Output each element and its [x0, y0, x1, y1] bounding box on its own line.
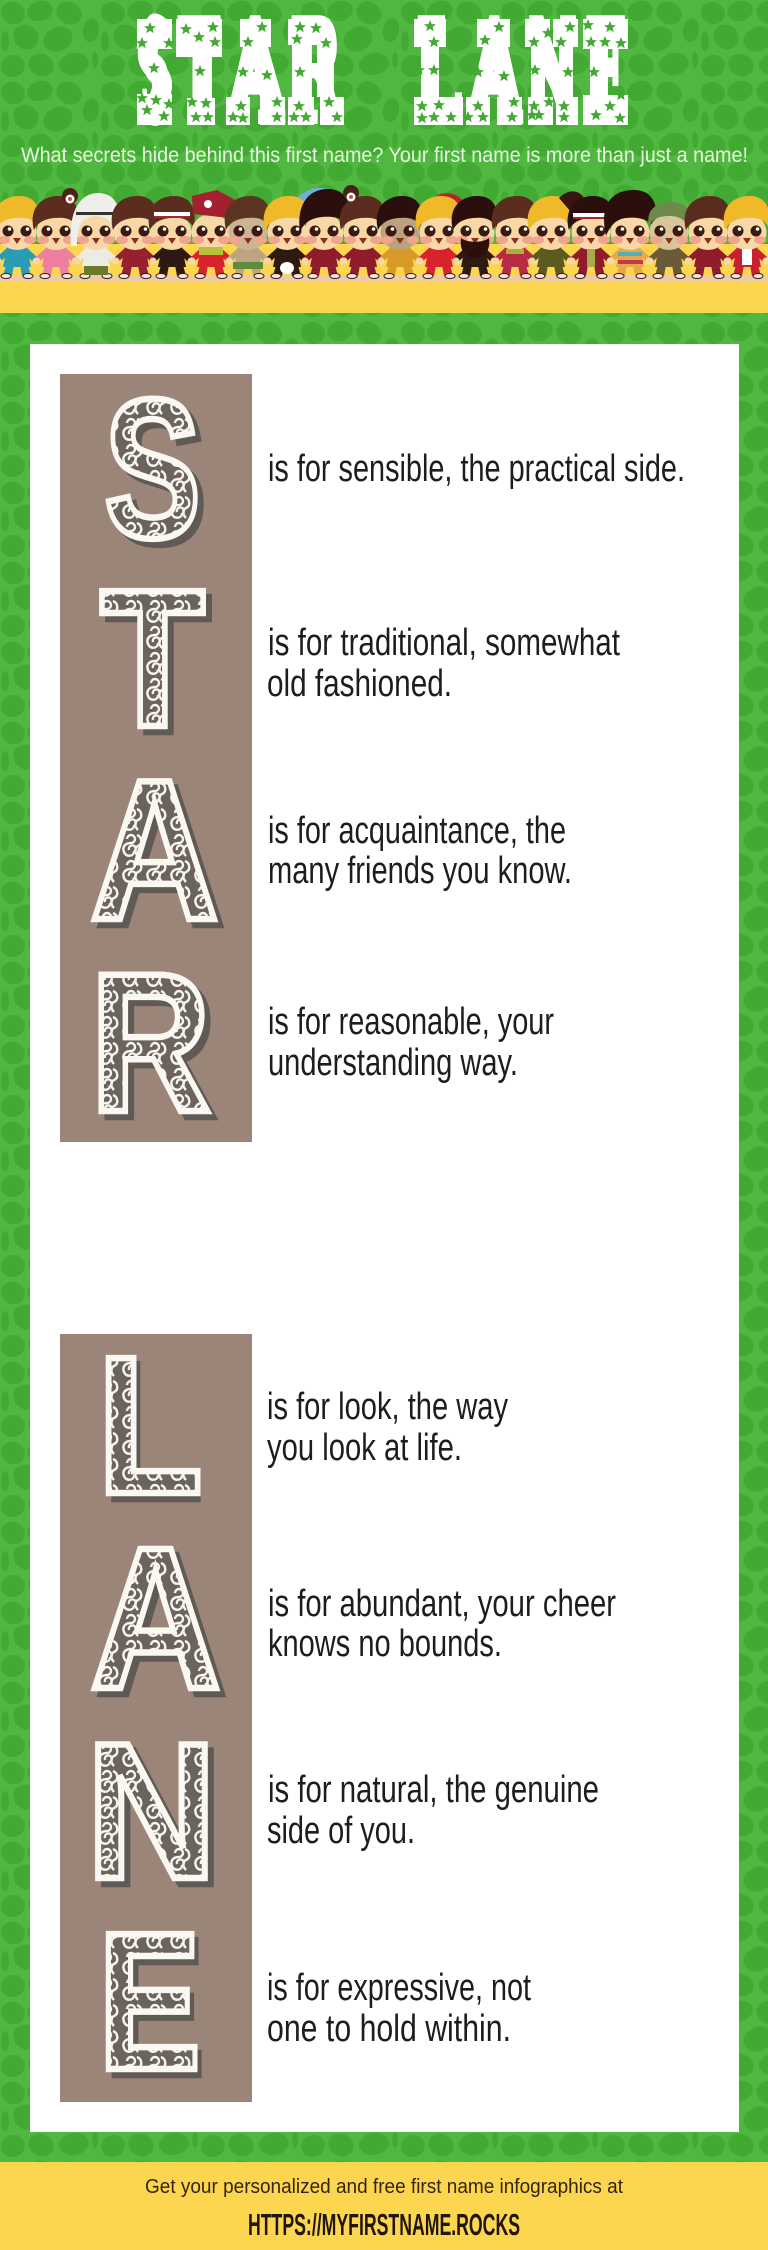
letter A: A	[90, 1505, 221, 1731]
child 13	[452, 196, 498, 278]
text: N lines	[267, 1769, 599, 1852]
letter S: S	[110, 364, 207, 585]
child 2	[33, 188, 79, 278]
child 18	[646, 202, 692, 278]
title	[136, 0, 628, 155]
text: L lines: is for look, the way	[267, 1386, 508, 1428]
child 4	[112, 196, 158, 278]
text: E lines: one to hold within.	[267, 2008, 511, 2050]
text: A lines	[268, 1583, 616, 1665]
child 15	[528, 191, 585, 278]
child 11	[377, 196, 423, 278]
text: R lines	[268, 1001, 554, 1084]
letter R: R	[90, 932, 211, 1153]
letter E: E	[98, 1892, 201, 2111]
ground line	[0, 276, 768, 281]
child 9	[299, 189, 350, 278]
letter T: T	[100, 549, 205, 768]
row of cartoon children	[0, 185, 768, 278]
child 8	[264, 188, 333, 278]
letter A: A	[90, 739, 219, 962]
child 17	[604, 190, 656, 278]
child 20	[724, 196, 768, 278]
footer url: HTTPS://MYFIRSTNAME.ROCKS	[248, 2207, 520, 2242]
child 10	[340, 185, 386, 278]
child 14	[492, 196, 538, 278]
letter N: N	[86, 1703, 217, 1920]
text: E lines	[267, 1967, 531, 2050]
child 5	[149, 196, 195, 278]
text: T lines	[267, 622, 620, 705]
child 12	[416, 193, 465, 278]
panel: STAR letter column	[60, 374, 252, 1142]
letter A: A	[96, 1511, 227, 1737]
panel: LANE letter column	[60, 1334, 252, 2102]
text: R lines: understanding way.	[268, 1042, 518, 1084]
text: R lines: is for reasonable, your	[268, 1001, 554, 1043]
panel: white content	[30, 344, 739, 2132]
footer text: Get your personalized and free first name infographics at	[145, 2176, 623, 2198]
child 1	[0, 196, 40, 278]
child 7	[225, 196, 271, 278]
letter E: E	[104, 1898, 205, 2117]
text: N lines: side of you.	[267, 1810, 415, 1852]
text: E lines: is for expressive, not	[267, 1967, 531, 2009]
text: N lines: is for natural, the genuine	[268, 1769, 599, 1811]
child 3	[71, 193, 122, 278]
text: A lines	[268, 810, 572, 892]
footer band	[0, 2162, 768, 2250]
text: A lines: many friends you know.	[268, 850, 572, 892]
text: L lines: you look at life.	[267, 1427, 462, 1469]
letter A: A	[96, 745, 225, 968]
child 16	[568, 196, 614, 278]
text: A lines: knows no bounds.	[268, 1623, 502, 1665]
child 6	[188, 190, 239, 278]
letter T: T	[106, 555, 211, 774]
child 19	[685, 196, 731, 278]
text: A lines: is for abundant, your cheer	[268, 1583, 616, 1625]
letter R: R	[96, 938, 217, 1159]
letter N: N	[92, 1709, 223, 1926]
text: T lines: is for traditional, somewhat	[268, 622, 620, 664]
yellow banner band	[0, 244, 768, 313]
text: T lines: old fashioned.	[267, 663, 452, 705]
text: L lines	[267, 1386, 508, 1469]
letter L: L	[97, 1316, 203, 1535]
text: A lines: is for acquaintance, the	[268, 810, 566, 852]
letter S: S	[104, 358, 201, 579]
letter L: L	[103, 1322, 203, 1541]
